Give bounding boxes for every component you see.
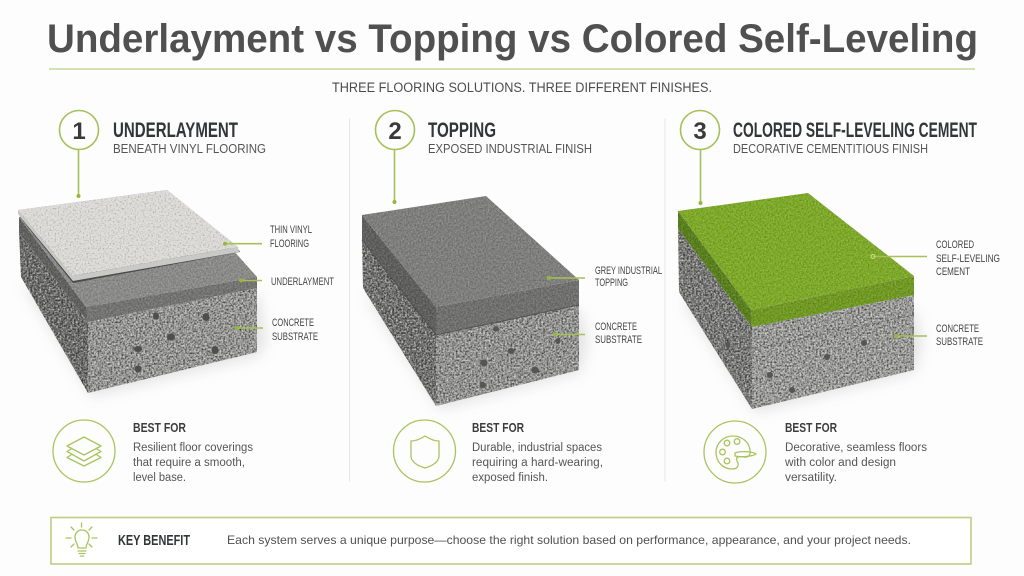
- heading: topping: TOPPING: [428, 119, 496, 142]
- best for: underlayment: [133, 421, 253, 484]
- callout: concrete substrate: SUBSTRATE: [936, 336, 983, 348]
- number badge 3: 3: [693, 118, 707, 145]
- number badge 1: 1: [72, 118, 86, 145]
- callout: concrete substrate: SUBSTRATE: [272, 331, 318, 343]
- number badge 3: [680, 110, 720, 205]
- panel: colored self-leveling cement: [678, 110, 1000, 484]
- best for: colored self-leveling: versatility.: [785, 472, 837, 484]
- number badge 2: 2: [388, 118, 402, 145]
- best for: topping: exposed finish.: [472, 472, 548, 484]
- callout: concrete substrate: [894, 323, 983, 348]
- callout: colored self-leveling cement: [871, 239, 1000, 278]
- best for: colored self-leveling: Decorative, seamless floors: [785, 442, 927, 454]
- best for: underlayment: Resilient floor coverings: [133, 442, 253, 454]
- key benefit text: Each system serves a unique purpose—choose the right solution based on performance, appearance, and your project needs.: [227, 533, 911, 547]
- callout: concrete substrate: SUBSTRATE: [595, 334, 642, 346]
- callout: underlayment: UNDERLAYMENT: [271, 276, 334, 288]
- callout: grey industrial topping: TOPPING: [595, 277, 628, 289]
- callout: colored self-leveling cement: SELF-LEVELING: [936, 253, 1000, 265]
- best for: colored self-leveling: BEST FOR: [785, 421, 837, 435]
- panel: topping: [362, 110, 662, 484]
- key benefit label: KEY BENEFIT: [118, 532, 190, 549]
- icon: layers: [53, 420, 115, 482]
- diagram: topping layers: [362, 196, 588, 409]
- best for: colored self-leveling: [784, 421, 927, 484]
- best for: topping: requiring a hard-wearing,: [472, 457, 603, 469]
- best for: underlayment: BEST FOR: [133, 421, 186, 435]
- callout: thin vinyl flooring: FLOORING: [270, 238, 309, 250]
- callout: concrete substrate: [235, 317, 318, 343]
- subheading: beneath vinyl flooring: BENEATH VINYL FLOORING: [113, 142, 266, 156]
- callout: underlayment: [239, 276, 334, 288]
- best for: colored self-leveling: with color and design: [784, 457, 896, 469]
- callout: colored self-leveling cement: CEMENT: [936, 266, 970, 278]
- callout: concrete substrate: CONCRETE: [272, 317, 314, 329]
- best for: topping: [472, 421, 603, 484]
- number badge 1: [60, 110, 98, 198]
- diagram: underlayment layers: [18, 190, 266, 396]
- callout: concrete substrate: [553, 321, 642, 346]
- subheading: exposed industrial finish: EXPOSED INDUSTRIAL FINISH: [428, 142, 592, 156]
- callout: grey industrial topping: GREY INDUSTRIAL: [595, 265, 662, 277]
- best for: topping: Durable, industrial spaces: [472, 442, 602, 454]
- subheading: decorative cementitious finish: DECORATIVE CEMENTITIOUS FINISH: [733, 142, 928, 156]
- subtitle: THREE FLOORING SOLUTIONS. THREE DIFFERENT FINISHES.: [332, 80, 712, 95]
- best for: underlayment: that require a smooth,: [133, 457, 245, 469]
- title: Underlayment vs Topping vs Colored Self-Leveling: [47, 17, 978, 61]
- callout: thin vinyl flooring: [223, 224, 312, 250]
- callout: colored self-leveling cement: COLORED: [936, 239, 974, 251]
- icon: palette: [704, 421, 766, 483]
- panel: underlayment: [18, 110, 334, 484]
- callout: concrete substrate: CONCRETE: [595, 321, 637, 333]
- number badge 2: [376, 110, 414, 204]
- panel: key benefit: [51, 518, 971, 564]
- best for: topping: BEST FOR: [472, 421, 524, 435]
- icon: light bulb: [66, 523, 97, 556]
- heading: underlayment: UNDERLAYMENT: [113, 119, 238, 142]
- diagram: colored self-leveling layers: [678, 193, 922, 412]
- best for: underlayment: level base.: [133, 472, 186, 484]
- callout: grey industrial topping: [547, 265, 662, 289]
- callout: thin vinyl flooring: THIN VINYL: [270, 224, 312, 236]
- callout: concrete substrate: CONCRETE: [936, 323, 979, 335]
- icon: shield: [394, 420, 456, 482]
